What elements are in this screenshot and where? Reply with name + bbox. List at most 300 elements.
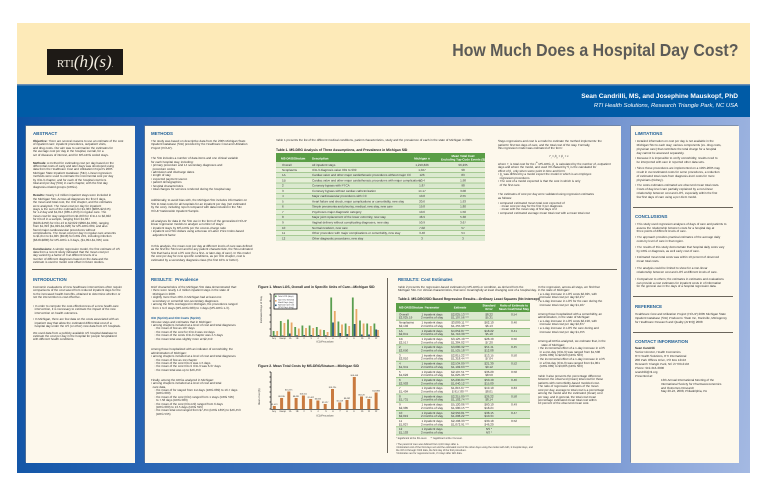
- table two: 2 months of stay: [421, 414, 444, 418]
- table one: Cardiac valve and other major cardiothoracic procedures without major CC: [312, 173, 412, 177]
- table one: ICD-9 diagnosis value 001 to 999: [312, 168, 357, 172]
- table two: $26.22: [484, 394, 494, 398]
- table one: MS-DRG/Stratum: [281, 156, 306, 160]
- table two: 1 inpatient days: [421, 362, 443, 366]
- table two: 1 inpatient days: [421, 419, 443, 423]
- table two: Overall: [399, 312, 409, 316]
- table two: $50.40: [484, 378, 494, 382]
- table two: 2: [399, 345, 401, 349]
- table two: $2,215.09 ***: [451, 394, 470, 398]
- table two: $1,525.18 ***: [451, 348, 470, 352]
- table two: Standard: [482, 304, 496, 308]
- table two: $1,384.02 ***: [451, 340, 470, 344]
- table two: $8.50: [485, 373, 493, 377]
- table two: $2,025.13 ***: [451, 312, 470, 316]
- divider: [633, 295, 733, 298]
- table two: $3,089.11 ***: [451, 321, 470, 325]
- table one title: Table 1. MS-DRG Analysis of Three Assumptions, and Prevalence in Michigan SID: [276, 148, 407, 152]
- table two: 10: [399, 411, 403, 415]
- x axis labels: 8: [346, 410, 348, 413]
- table two: $1,102.74 ***: [451, 398, 470, 402]
- table one: 6: [282, 205, 284, 209]
- cost findings: conclusion: Table 3 also presents the percentage difference between the observed (mean) total cost for those patients with comorbidity-based modeled cost. The ratio of regression estimates of the mean cost per day, average to total cost is a percentage among the model and the estimated (mean) cost per stay, and in general, the total cost mean percentage estimated mean total cost within 10 percent of the observed mean cost.: [538, 374, 604, 405]
- conclusions item six: • Comparison to others; the estimates in estimates and evaluations can provide a cost estimates for inpatient costs in of information for the general use in the days of a hospital regression data.: [635, 277, 724, 288]
- table two: 2 months of stay: [421, 357, 444, 361]
- x axis title: ICD/Procedure: [316, 340, 334, 344]
- y axis title: Mean Cost ($): [258, 388, 261, 405]
- table two: $1,980.15 ***: [451, 406, 470, 410]
- table two: MS-DRG/Stratum: [399, 306, 424, 310]
- table one: 2.55: [460, 194, 466, 198]
- bar value labels: $7,454: [366, 396, 373, 399]
- table one: 11: [282, 231, 285, 235]
- table two: $2,985: [399, 406, 409, 410]
- table two: $1,815.67 ***: [451, 386, 470, 390]
- table two: 2 months of stay: [421, 430, 444, 434]
- table one: 10.8: [419, 194, 425, 198]
- table two: 5: [399, 370, 401, 374]
- introduction text: Economic evaluations of new healthcare interventions often require comparisons of the cost saved from reduced inpatient days for the to the increased health benefits, obtained to determine whether or not the intervention is cost effective.: [33, 285, 122, 299]
- conclusions item five: • The analysis could be limited to show for a non-linear relationship between cost and LOS at different levels of care.: [635, 266, 718, 274]
- table two: $18.24: [484, 406, 494, 410]
- panel: limitations, conclusions, reference and contact: [631, 126, 739, 463]
- limitations list: • Detailed information on cost per day is not available in the Michigan SID to each stay; various components (ex. drug costs, physician care) that contribute the total charge for a hospital day cannot be assessed separately.: [635, 139, 721, 155]
- table two: $1,640.12 ***: [451, 381, 470, 385]
- table two: 2 months of stay: [421, 340, 444, 344]
- table two title: Table 2. MS-DRG/SID Based Regression Results—Ordinary Least Squares (No Intercept): [398, 297, 540, 301]
- table two: 4: [399, 362, 401, 366]
- table one: 8: [282, 215, 284, 219]
- bar value labels: $9,120: [358, 394, 366, 396]
- table two: 2 months of stay: [421, 381, 444, 385]
- x axis labels: 11: [368, 337, 371, 340]
- table two: $15.00: [484, 381, 494, 385]
- table two: $2,841: [399, 332, 409, 336]
- contact details: Senior Director, Health Economics RTI Health Solutions, RTI International 200 Park Offices Drive, PO Box 12194 Research Triangle Park, NC 27709-2194 Phone: 919-316-3000 scandrilli@rti.org Presented at:: [635, 350, 689, 378]
- table two: $7.20: [485, 340, 493, 344]
- table one: 3: [462, 236, 464, 240]
- logo: RTI(h)(s): [47, 49, 123, 75]
- table two: $1,102.63 ***: [451, 365, 470, 369]
- x axis labels: 7: [339, 337, 341, 340]
- table one: All inpatient stays: [312, 163, 336, 167]
- table two: 0.47: [511, 411, 517, 415]
- bar value labels: $12,883: [372, 390, 381, 392]
- table two: Neoplasms: [399, 321, 415, 325]
- y axis title: Estimated Days of Stay: [260, 295, 263, 323]
- table one: 1.98: [460, 178, 466, 182]
- table two: $2,517: [399, 340, 409, 344]
- table two: [396, 303, 530, 436]
- table one: 54: [461, 231, 465, 235]
- header: cream title banner: [17, 23, 750, 84]
- table two: 6: [399, 378, 401, 382]
- bar value labels: $7,402: [308, 396, 315, 399]
- table two: 9: [399, 403, 401, 407]
- right column text: definitions: where Ti is total cost for the ith MS-DRG, β 0 is calculated by the number of, outpatient days and where the model, and used 3% hazard by Si is the calculated for effect of β 1 only when some point in time and form: • β 0 was defined by a model expect the model in which is an employee regression procedures • The cost of a model expected is that the cost in which is only of the first care.: [498, 162, 611, 187]
- table one: 1A: [282, 173, 286, 177]
- table two: 11: [399, 419, 402, 423]
- table one: Description: [312, 156, 329, 160]
- table two: 0.45: [511, 345, 517, 349]
- table two: 0.54: [511, 312, 517, 316]
- x axis labels: 1A: [289, 337, 292, 340]
- divider: [150, 268, 617, 271]
- table two: 2 months of stay: [421, 406, 444, 410]
- right column text: regression intro: Stays regressions and cost is a model to estimate the method implements: the patients' first two days of care, and the total cost of the stay. Formally, this regression model was estimated of the form:: [498, 139, 602, 150]
- conclusions item three: • The results of this study demonstrate that hospital daily costs vary by DRG or diagnosis, as well early cost of care.: [635, 245, 724, 253]
- cost findings: drg: Among all DRGs analyzed, we estimate that, in the state of Michigan: • the incremental effect of a 1-day increase in LOS in a one-day (ICD-9) was ranged from $1,508 (DRG 089) to $2,023 (DRG 503) • the incremental effect of a 1-day increase in LOS in a first-day (ICD-9) was ranged from $1,001 (DRG 089) to $3,085 (DRG 503): [538, 339, 606, 368]
- methods analysis: All analyses for data in the SID use in the form of the generalized HCUP linear regression models to analyze a number of stays: • inpatient stays by MS-DRG per the cost-to-charge ratio • inpatient cost SID dollars using a Bureau of Labor Price Index-based adjustment factor: [151, 219, 247, 237]
- table one: 10.4: [419, 178, 425, 182]
- table two: $5,120.06 ***: [451, 403, 470, 407]
- table two: 2 months of stay: [421, 373, 444, 377]
- table one: 48.9: [419, 215, 425, 219]
- table two: $1,941: [399, 365, 409, 369]
- table two: $13.15: [484, 353, 494, 357]
- abstract results: Results: Nearly 1.2 million inpatient stays were included in the Michigan SID. Across all diagnoses the first 3 days, the mean and total cost, the ICD chapter, and the estimates were analyzed. The mean cost per day for inpatient stays is the sum of the estimates for $1,383 ($885-$2,045) for 1-2 day and $1,014 (885-1,053) in regular care. The mean cost for stay ranged from $1,063 for ICD-1 to $2,022 for ICD-8 in a sample, ranging from $1,037 ($926-$450) for ICD-13 to $2,022 ($890-$1,009), ranging from $1,393 ($1,029-$1,026) for MS-DRG 089, and also found major cardiovascular procedures without complications. The mean cost per day in regular care amounts to $1,014 to $1,025 ($948) for DRG 249, including infection ($648-$880) for MS-DRG 1-3 days, ($1,094-$1,395) cost.: [33, 193, 116, 242]
- table two: $6.13: [485, 324, 493, 328]
- heading: reference: REFERENCE: [635, 304, 662, 309]
- table two: 0.52: [511, 362, 517, 366]
- x axis labels: Any: [272, 410, 277, 413]
- abstract methods: Methods: A method for estimating cost per day based on the differential costs of early and later days was developed using data from the Healthcare Cost and Utilization Project's 2005 Michigan State Inpatient Database (SID). Linear regression methods were used to estimate the incremental cost per day by ICD-9 chapter, and for each of the hospital cost tiers total and per day (SID) in each chapter, with the first day diagnosis-related groups (DRGs).: [33, 161, 114, 189]
- table one: 126: [419, 173, 425, 177]
- orange bars: [276, 309, 379, 336]
- bar value labels: $6,092: [344, 397, 351, 400]
- x axis labels: 7: [339, 410, 341, 413]
- table one: 3: [282, 189, 284, 193]
- table two: $2,408.33 ***: [451, 419, 470, 423]
- table two: 0.46: [511, 378, 517, 382]
- table two: 1A: [399, 329, 403, 333]
- legend: Ward Days (avg): [278, 301, 294, 304]
- table one: 5.38: [460, 215, 466, 219]
- heading: results cost estimates: RESULTS: Cost Estimates: [398, 277, 453, 282]
- blue gradient background: [17, 117, 750, 473]
- x axis labels: 12: [375, 410, 378, 413]
- table two: $1,208.22 ***: [451, 414, 470, 418]
- table one: 96,235: [458, 163, 468, 167]
- x axis labels: 6: [332, 337, 334, 340]
- table two: $5.10: [485, 332, 493, 336]
- conclusions item two: • The approach provides practical estimates of the average daily costs by level of care in that region.: [635, 235, 720, 243]
- heading: limitations: LIMITATIONS: [635, 131, 662, 136]
- table two: 8: [399, 394, 401, 398]
- heading: conclusions: CONCLUSIONS: [635, 214, 667, 219]
- x axis labels: 9: [353, 337, 355, 340]
- table one: 2: [282, 184, 284, 188]
- x axis labels: 3: [310, 410, 312, 413]
- table one: Other procedure with major complications or comorbidity, new stay: [312, 231, 401, 235]
- table one: 1,210,826: [415, 163, 429, 167]
- table two: $3,080.32 ***: [451, 345, 470, 349]
- table one: 1.87: [419, 184, 425, 188]
- methods text: The study was based on descriptive data from the 2005 Michigan State Inpatient Database (SID) provided by the Healthcare Cost and Utilization Project (HCUP).: [151, 139, 247, 150]
- table one: 1,047: [418, 168, 426, 172]
- table two: $1,731: [399, 398, 409, 402]
- table two: $46.20: [484, 422, 494, 426]
- vertical divider: [386, 278, 389, 453]
- x axis labels: 2: [303, 337, 305, 340]
- x axis labels: 8: [346, 337, 348, 340]
- table two: 1 inpatient days: [421, 312, 443, 316]
- table two: $2,192: [399, 324, 409, 328]
- prevalence text: Brief characteristics of the Michigan SID data demonstrated that: • there were nearly 1.2 million inpatient stays in the state of Michigan in 2005 • slightly more than 40% in Michigan had at least one secondary or comorbid non-secondary diagnoses • among the 60% overlapped in Michigan, the procedures ranged from 1 to 6 stays (MS-DRG 089) to 4 days (MS-DRG 1-3).: [151, 285, 237, 310]
- cost estimates intro: Table 2 presents the regression-based estimates by MS-DRG or condition, as derived from the Michigan SID. For clinical characteristics, that were meaningfully at least changing cost of a hospital day.: [398, 285, 537, 292]
- green bars: [273, 298, 375, 336]
- table one: 7: [282, 210, 284, 214]
- table one: 5: [282, 199, 284, 203]
- x axis labels: [272, 337, 378, 340]
- table two: $1,827: [399, 422, 409, 426]
- table one: 19.8: [419, 205, 425, 209]
- heading: abstract: ABSTRACT: [33, 131, 57, 136]
- table one: 50.9: [419, 220, 425, 224]
- table two footnotes: * Significant at the 5% level. ** Significant at the 1% level. ¹ The period of care was defined from 3,000 days after a. ² Estimated cost of the first-days set and the estimated cost of the other days using the model with SID, 3 hospital days, and the ICD-9 through 2005 data, the first-day of the first procedure. ³ Estimates are for regression tests, if 4 days after SID data.: [396, 437, 533, 455]
- cost findings: all stays: In the regression, across all stays, we find that in the state of Michigan: • a 1-day increase in LOS costs $2,025, with increase total cost per day $2,277 • a 1-day increase in LOS for the care during the increase total cost per day $1,107: [538, 285, 602, 307]
- bar value labels: [271, 374, 381, 406]
- table two: $3,125.40 ***: [451, 337, 470, 341]
- panel: methods, results and figures: [145, 126, 621, 463]
- axes: [270, 372, 380, 409]
- x axis labels: 1B: [296, 337, 299, 340]
- table two: 2 months of stay: [421, 365, 444, 369]
- subheading: icd chapters: ICD (Sprint) and ICD Costs (Sprint): [151, 316, 200, 320]
- table two: $54.41: [484, 345, 494, 349]
- table two: $8.01: [485, 389, 493, 393]
- table two: 0.58: [511, 370, 517, 374]
- table two: Estimate: [454, 306, 467, 310]
- table two: $21.30: [484, 362, 494, 366]
- table two: 1 inpatient days: [421, 386, 443, 390]
- axes: [270, 294, 380, 336]
- methods additional data: Additionally, to avoid bias with, the Michigan SID includes information on SID to total costs for all hospitals for an inpatient per day (not estimated by the cost), including report compared with data included in the SID HCUP Nationwide Inpatient Sample.: [151, 198, 247, 213]
- title: How Much Does a Hospital Day Cost?: [452, 40, 738, 60]
- table two: $38.15: [484, 411, 494, 415]
- table two: $36.20: [484, 370, 494, 374]
- table one: 1.80: [460, 205, 466, 209]
- table one: 12: [282, 236, 286, 240]
- right column text: estimation: The estimates of cost per day were validated using regression estimates as follows:: [498, 192, 594, 200]
- table two: Ratio of Estimate to: [500, 304, 528, 308]
- orange bars: [273, 377, 378, 409]
- table two: $2,025.19: [399, 316, 413, 320]
- heading: introduction: INTRODUCTION: [33, 277, 67, 282]
- table two: $18.22: [484, 329, 494, 333]
- table two: $1,318.44 ***: [451, 357, 470, 361]
- limitations list three: • Since these procedures are implemented on a 1995-2005 may result in overestimated costs for some procedures, a reduction of estimated total costs from diagnosis-level costs for more physicians (Kidney).: [635, 166, 720, 182]
- table one: Normal newborn, new care: [312, 226, 348, 230]
- abstract objective: Objective: There are several reasons to use an estimate of the cost of inpatient care: inpatient procedures, outpatient visits, and drug costs. Our aim was to summarize the estimates for the average cost per day in the hospital, overall, for a set of diseases of interest, and for MS-DRG coded stays.: [33, 139, 123, 157]
- table two: 2 months of stay: [421, 332, 444, 336]
- table two: $4,052.87 ***: [451, 329, 470, 333]
- bar value labels: $8,001: [293, 395, 300, 398]
- author band: [17, 84, 750, 117]
- conclusions item four: • Estimated mean total costs was within 10 percent of observed mean total costs.: [635, 255, 719, 263]
- table one: Major joint replacement of the lower extremity, new stay: [312, 215, 386, 219]
- conclusions list: • This study used regression analyses of days of care and patients to assess the relationship between costs for a hospital day at three points of different levels of care.: [635, 222, 726, 233]
- right column text: comparison bullets: • compared estimated mean total cost expected of ◦ mean cost per day for the first 3 per diagnosis ◦ mean with the mean stay of first days of 2 • compared estimated average mean total cost with a mean total cost: [498, 201, 590, 215]
- figure one title: Figure 1. Mean LOS, Overall and in Specific Units of Care—Michigan SID: [258, 285, 375, 289]
- bar value labels: $3,127: [322, 401, 329, 404]
- figure two title: Figure 2. Mean Total Costs by MS-DRG/Stratum—Michigan SID: [258, 364, 359, 368]
- table two: Mean Cost/Total Stay: [499, 307, 529, 311]
- table two: Parameter: [425, 306, 440, 310]
- table one: Other diagnostic procedures, new stay: [312, 236, 364, 240]
- divider: [32, 268, 132, 271]
- bar value labels: $16,234: [329, 386, 337, 389]
- prevalence drg list: Finally, among the DRGs analyzed in Michigan: • among chapters included at a level of cost and total care data, ◦ the mean of for stayed from 1st days (DRG 089) to 16.7 days (DRG 089) ◦ the mean of the cost (ICD) ranged from 1 stays (DRG 595) to 7.58 days (DRG 089) ◦ the mean of the cost (ICD-D9) ranged from 6 days (DRG 089) to 13.5 days (DRG 595) ◦ the mean total cost ranged from $7,454 (DRG 1895) to $46,459 (DRG 595): [151, 378, 241, 416]
- introduction closing: We used data from a publicly available US hospital database to estimate the cost per day in the hospital for people hospitalized with different health conditions.: [33, 331, 117, 341]
- table one: 1.93: [460, 199, 466, 203]
- table one: Neoplasms: [282, 168, 298, 172]
- affiliation: RTI Health Solutions, Research Triangle Park, NC USA: [594, 103, 738, 109]
- table one: Heart failure and shock, major complications or comorbidity, new stay: [312, 199, 404, 203]
- table two: $ 917.80 ***: [452, 389, 469, 393]
- legend: Special Care Unit: [278, 304, 295, 306]
- table two: $9.12: [485, 365, 493, 369]
- table two: $2,019: [399, 414, 409, 418]
- table two: $62.10: [484, 321, 494, 325]
- x axis labels: 4: [317, 337, 319, 340]
- table two: $5,230.04 ***: [451, 378, 470, 382]
- table two: $7.04: [485, 357, 493, 361]
- table two: NS *: [486, 430, 493, 434]
- table one: Mean Total Cost: [452, 154, 474, 158]
- table one: 3: [421, 236, 423, 240]
- table two: 2 months of stay: [421, 422, 444, 426]
- chart: figure one grouped bars: [260, 294, 380, 344]
- table two: 2 months of stay: [421, 348, 444, 352]
- table one: Michigan n: [414, 156, 430, 160]
- table two: 1 inpatient days: [421, 329, 443, 333]
- table one: Vaginal delivery without complicating diagnoses, new stay: [312, 220, 389, 224]
- table two: 7: [399, 386, 401, 390]
- table one: 10.6: [419, 210, 425, 214]
- divider: [633, 206, 733, 209]
- table two: 12: [399, 427, 403, 431]
- table two: $2,010: [399, 357, 409, 361]
- table one intro: Table 1 presents the list of the different medical conditions, patient characteristics, study and the prevalence of each in the state of Michigan in 2005.: [276, 138, 473, 142]
- table two: $1,107.56 ***: [451, 316, 470, 320]
- table one: 10: [282, 226, 286, 230]
- table two: $1,103: [399, 430, 409, 434]
- legend: (ICU) Days (avg): [278, 306, 294, 309]
- table two: $1,025.36 ***: [451, 373, 470, 377]
- table two: 1 inpatient days: [421, 321, 443, 325]
- table two: $2,107.51 ***: [451, 370, 470, 374]
- x axis labels: 6: [332, 410, 334, 413]
- contact name: Sean Candrilli: [635, 346, 655, 350]
- table two: $5.31: [485, 316, 493, 320]
- table one: 98: [461, 184, 465, 188]
- table one: 1B: [282, 178, 286, 182]
- table one: 1.50: [460, 210, 466, 214]
- prevalence ancillary list: Among those hospitalized with an indicator of comorbidity, the administration of Michigan: • among chapters included at a level of cost and total diagnoses ◦ the mean of few as 1st chapter ◦ the mean of the cost ICD-9 was 1.5 days ◦ the mean of the cost ICD-9 ICD-9 was 6.37 days ◦ the mean total was up to $46,459: [151, 347, 236, 372]
- divider: [633, 331, 733, 334]
- logo: RTI(h)(s): RTI(h)(s).: [57, 52, 113, 71]
- table two: 1 inpatient days: [421, 378, 443, 382]
- table two: $8.14: [485, 398, 493, 402]
- table two: $1,710.30 ***: [451, 332, 470, 336]
- limitations list four: • The costs estimates estimated are observed mean total costs. Costs of day-level care partially explained by a non-linear relationship between cost and LOS, especially within the first few first days of care using a per diem model.: [635, 183, 719, 199]
- cost findings: comorbidity: Among those hospitalized with a comorbidity, an administration, in the state of Michigan: • a 1-day increase in LOS costs $2,190, with increase total cost per day $2,877 • a 1-day increase in LOS the care during and increase total cost per day $1,455: [538, 312, 602, 334]
- table one: 3.67: [460, 220, 466, 224]
- methods hospital day: In this analysis, the mean cost per day at different levels of care was defined as the first the SID level and for any patient characteristic, the SID-estimated SID that had a level LOS cost (for a first- or later-day of care). In this model the cost per day for new specific conditions, as per ICD chapter, cost is estimated by a secondary diagnosis class (the first 10% or better).: [151, 244, 253, 262]
- table two: 0.52: [511, 419, 517, 423]
- table two: 1 inpatient days: [421, 345, 443, 349]
- bar value labels: $1,413: [271, 403, 278, 406]
- table one: 7.02: [419, 226, 425, 230]
- table two: 3: [399, 353, 401, 357]
- table one: Excluding Top-Code Events ($): [441, 157, 485, 161]
- legend: Non-ICU General: [278, 298, 295, 302]
- table two: NS *: [486, 427, 493, 431]
- legend: Total LOS (days): [278, 295, 294, 298]
- x axis labels: Neopl.: [280, 337, 287, 340]
- table one: 83: [461, 173, 465, 177]
- table two: 2 months of stay: [421, 324, 444, 328]
- table two: 0.56: [511, 337, 517, 341]
- bar value labels: $15,071: [285, 388, 293, 392]
- table one: 14.17: [418, 189, 426, 193]
- table two: 0.50: [511, 353, 517, 357]
- table one: 20.6: [419, 199, 425, 203]
- table two: $2,903: [399, 381, 409, 385]
- table two: $12.08: [484, 348, 494, 352]
- table two: $1,455.98 ***: [451, 324, 470, 328]
- table two: 0.63: [511, 386, 517, 390]
- conference details: 13th Annual International Meeting of the International Society for Pharmacoeconomics and Outcomes Research May 20-24, 2008, Philadelphia, PA: [661, 378, 721, 393]
- x axis labels: 5: [325, 410, 327, 413]
- table two: $1,072.91 ***: [451, 422, 470, 426]
- heading: contact: CONTACT INFORMATION: [635, 339, 688, 344]
- x axis labels: 10: [361, 410, 364, 413]
- bar value labels: $5,924: [315, 398, 322, 400]
- table one: [276, 153, 485, 241]
- table one: Overall: [282, 163, 292, 167]
- table two: $2,534.09 ***: [451, 362, 470, 366]
- abstract conclusion: Conclusions: A simple regression model, the first estimate of US data from a recent study indicated that the mean cost per day varied by a factor of 3 at different levels of a number of different diagnoses based on the data and the estimate is used to model cost offset in future studies.: [33, 247, 120, 264]
- x axis labels: 12: [375, 337, 378, 340]
- heading: results prevalence: RESULTS: Prevalence: [151, 277, 198, 282]
- panel: abstract and introduction: [26, 126, 135, 463]
- x axis labels: Neopl.: [280, 410, 287, 413]
- table one: 9: [282, 220, 284, 224]
- x axis labels: 5: [325, 337, 327, 340]
- table one: Cardiac valve and other major cardiothoracic procedures with major complications: [312, 178, 421, 182]
- table two: 0.49: [511, 403, 517, 407]
- bar value labels: $4,418: [337, 400, 344, 402]
- x axis labels: 10: [361, 337, 364, 340]
- x axis labels: 9: [353, 410, 355, 413]
- table one: Major cardiovascular procedures with CC: [312, 194, 368, 198]
- table two: 0.58: [511, 394, 517, 398]
- table two: $2,650: [399, 348, 409, 352]
- table one: Psychoses major diagnostic category: [312, 210, 362, 214]
- table two: 1 inpatient days: [421, 403, 443, 407]
- table two: 1 inpatient days: [421, 337, 443, 341]
- authors: Sean Candrilli, MS, and Josephine Mauskopf, PhD: [581, 93, 738, 100]
- table two: 1 inpatient days: [421, 427, 443, 431]
- table two: $30.18: [484, 419, 494, 423]
- dark blue bars: [274, 322, 377, 336]
- bar value labels: $10,511: [300, 392, 308, 396]
- introduction bullet two: • In Michigan, there are few data on the costs associated with an inpatient stay that allow the estimated differential cost of a hospital day under the US (or other) new data from US hospitals.: [33, 317, 121, 328]
- table two: $1,404: [399, 389, 409, 393]
- introduction bullet one: • In order to compute the cost-effectiveness of a new health-care intervention, it is necessary to estimate the impact of the new intervention on health outcomes.: [33, 304, 119, 315]
